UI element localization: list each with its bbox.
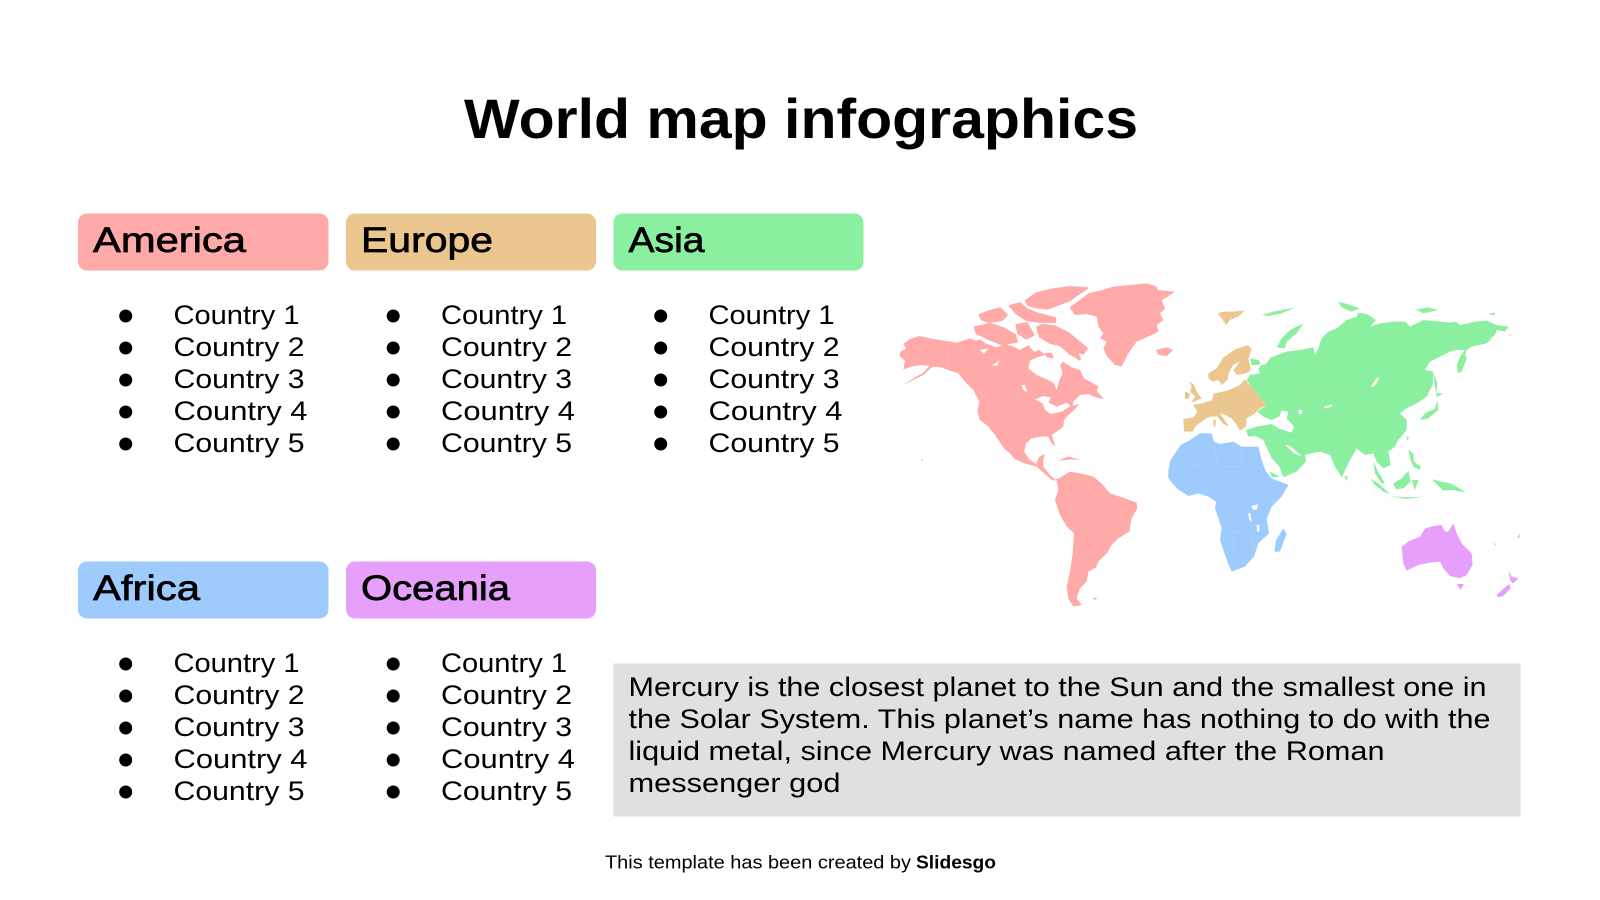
list: Asia countries: Country 1 xyxy=(708,300,834,330)
footer credit: This template has been created by xyxy=(605,852,911,872)
list: Oceania countries: Country 3 xyxy=(441,712,572,742)
map region: America xyxy=(899,283,1175,607)
map region: Oceania xyxy=(1402,523,1520,597)
heading: Asia: Asia xyxy=(628,221,705,260)
list: Europe countries: Country 3 xyxy=(441,364,572,394)
map region: Africa xyxy=(1168,433,1288,572)
panel: Oceania xyxy=(346,562,596,806)
list: Asia countries xyxy=(654,300,842,458)
list: Africa countries: Country 2 xyxy=(174,680,304,710)
list: Oceania countries: Country 5 xyxy=(441,776,572,806)
title: World map infographics xyxy=(464,87,1138,150)
panel: Africa xyxy=(78,562,328,806)
list: Asia countries: Country 3 xyxy=(708,364,840,394)
heading: Europe xyxy=(346,214,596,270)
description text block: Mercury is the closest planet to the Sun and the smallest one in xyxy=(628,672,1486,702)
footer credit: Slidesgo xyxy=(916,852,996,872)
list: Asia countries: Country 5 xyxy=(708,428,840,458)
list: Europe countries: Country 1 xyxy=(441,300,567,330)
list: America countries: Country 5 xyxy=(174,428,304,458)
panel: America xyxy=(78,214,328,458)
description text block xyxy=(614,664,1520,816)
list: Oceania countries: Country 1 xyxy=(441,648,567,678)
panel: Asia xyxy=(614,214,864,458)
list: Asia countries: Country 4 xyxy=(708,396,842,426)
list: Asia countries: Country 2 xyxy=(708,332,840,362)
heading: America xyxy=(78,214,328,270)
list: Africa countries: Country 5 xyxy=(174,776,304,806)
list: Europe countries: Country 5 xyxy=(441,428,572,458)
list: America countries: Country 1 xyxy=(174,300,300,330)
map region: Asia xyxy=(1246,302,1513,499)
heading: Oceania xyxy=(346,562,596,618)
list: America countries: Country 4 xyxy=(174,396,308,426)
heading: Africa: Africa xyxy=(93,569,201,608)
list: America countries: Country 2 xyxy=(174,332,304,362)
map region: Europe xyxy=(1183,311,1267,432)
list: Africa countries: Country 3 xyxy=(174,712,304,742)
list: Europe countries: Country 4 xyxy=(441,396,575,426)
description text block: the Solar System. This planet’s name has nothing to do with the xyxy=(628,704,1490,734)
heading: America: America xyxy=(93,221,247,260)
heading: Asia xyxy=(614,214,864,270)
world map xyxy=(899,283,1520,607)
panel: Europe xyxy=(346,214,596,458)
heading: Europe: Europe xyxy=(361,221,493,260)
heading: Africa xyxy=(78,562,328,618)
list: Oceania countries: Country 2 xyxy=(441,680,572,710)
list: America countries: Country 3 xyxy=(174,364,304,394)
list: Europe countries: Country 2 xyxy=(441,332,572,362)
list: Africa countries: Country 1 xyxy=(174,648,300,678)
list: Africa countries: Country 4 xyxy=(174,744,308,774)
heading: Oceania: Oceania xyxy=(361,569,511,608)
list: Africa countries xyxy=(119,648,308,806)
description text block: messenger god xyxy=(628,768,840,798)
list: Oceania countries: Country 4 xyxy=(441,744,575,774)
list: Europe countries xyxy=(387,300,575,458)
list: America countries xyxy=(119,300,308,458)
list: Oceania countries xyxy=(387,648,575,806)
description text block: liquid metal, since Mercury was named after the Roman xyxy=(628,736,1384,766)
